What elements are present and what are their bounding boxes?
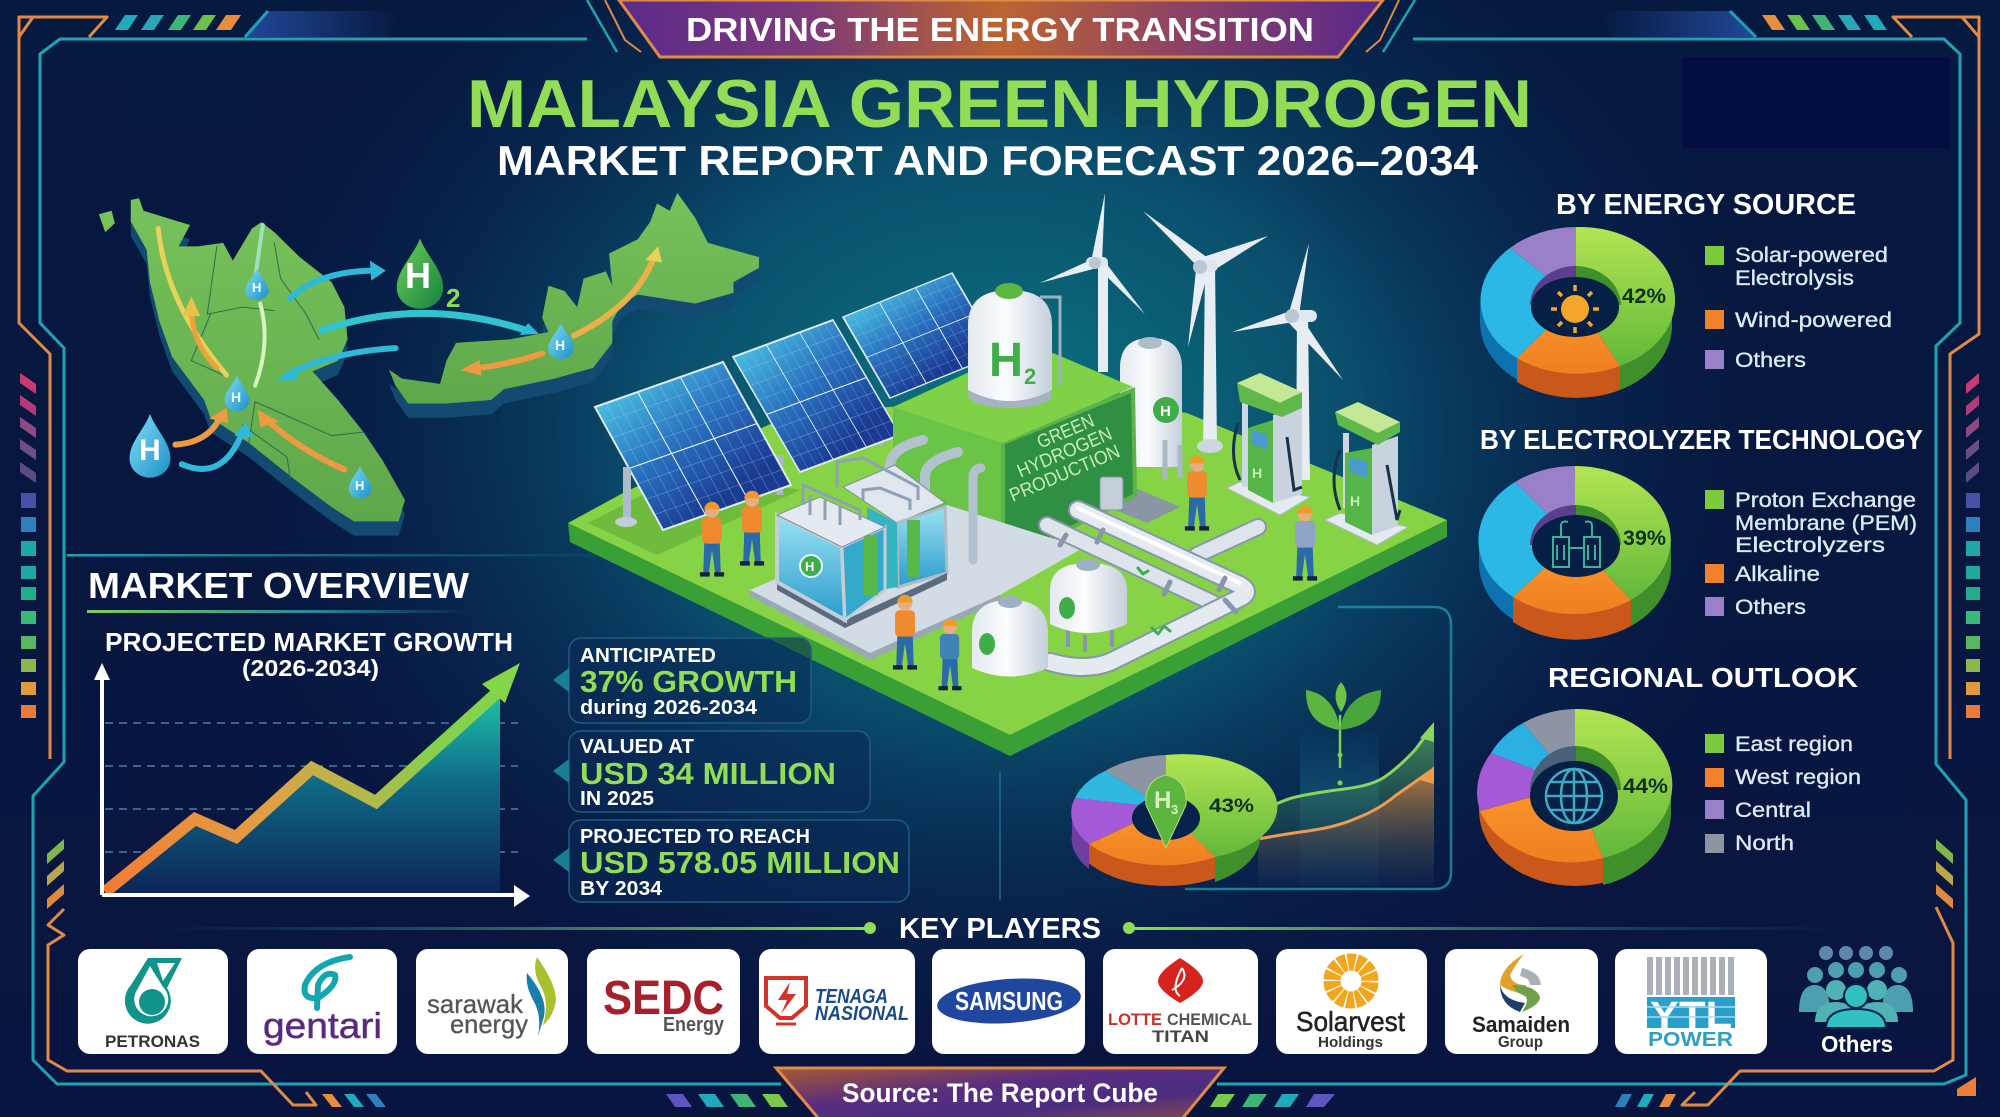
H2 storage tank: H	[989, 334, 1023, 387]
icon: H2 green drop: 2	[446, 283, 460, 313]
callout: USD 34 million	[553, 731, 870, 812]
icon: H blue drop: H	[139, 434, 161, 467]
logo card: Sarawak Energy: energy	[450, 1009, 528, 1039]
icon: small drops on map: H	[355, 478, 364, 493]
logo card: YTL Power: POWER	[1648, 1029, 1734, 1051]
callout: 37% growth	[553, 638, 811, 723]
icon: H blue drop	[130, 414, 170, 478]
logo card: Petronas: PETRONAS	[105, 1032, 200, 1051]
H2 storage tank: 2	[1024, 364, 1036, 389]
legend: regional outlook: Central	[1735, 799, 1811, 822]
map route arrows	[158, 225, 662, 470]
callout: 37% growth: 37% GROWTH	[580, 664, 797, 699]
logo card: SEDC Energy: Energy	[663, 1014, 725, 1036]
icon: H2 green drop: H	[405, 255, 431, 296]
section: by energy source	[1480, 189, 1892, 398]
donut chart: energy source: 42%	[1622, 285, 1666, 308]
fuel pumps: H	[1350, 493, 1360, 509]
label on building: HYDROGEN	[1014, 424, 1115, 482]
legend: energy source	[1705, 244, 1892, 372]
donut chart: electrolyzer technology: 39%	[1623, 527, 1666, 550]
donut chart: energy source	[1480, 227, 1675, 398]
logo card: SEDC Energy	[587, 949, 740, 1054]
illustration: green hydrogen production plant	[568, 193, 1447, 756]
fuel pumps	[1227, 373, 1408, 545]
donut chart: electrolyzer technology	[1478, 466, 1671, 640]
electrolyzer modules	[750, 440, 1083, 660]
title: MALAYSIA GREEN HYDROGEN	[467, 66, 1532, 142]
others: people group icon	[1799, 946, 1913, 1057]
legend: electrolyzer technology: Alkaline	[1735, 563, 1820, 586]
logo card: Lotte Chemical Titan: CHEMICAL	[1167, 1010, 1252, 1029]
source banner: Source: The Report Cube	[842, 1078, 1158, 1108]
logo card: Sarawak Energy	[416, 949, 568, 1054]
logo card: Solarvest: Holdings	[1318, 1034, 1383, 1051]
icon: electrolyzer	[1553, 522, 1600, 567]
legend: electrolyzer technology: Proton Exchange	[1735, 489, 1916, 512]
source banner	[776, 1068, 1224, 1117]
section: by electrolyzer technology	[1478, 424, 1923, 640]
legend: electrolyzer technology: Membrane (PEM)	[1735, 512, 1917, 535]
small donut chart: H	[1154, 787, 1171, 814]
logo card: Samaiden: Samaiden	[1472, 1012, 1570, 1037]
peninsular Malaysia	[131, 198, 405, 521]
legend: regional outlook: West region	[1735, 766, 1861, 789]
pipework	[1047, 508, 1258, 667]
banner heading: DRIVING THE ENERGY TRANSITION	[686, 11, 1314, 48]
logo card: Solarvest: Solarvest	[1296, 1006, 1405, 1037]
white silo	[1115, 337, 1182, 523]
logo card: Tenaga Nasional	[759, 949, 915, 1054]
line chart: projected market growth	[94, 627, 530, 907]
logo card: Samsung	[932, 949, 1085, 1054]
subtitle: MARKET REPORT AND FORECAST 2026–2034	[497, 137, 1479, 184]
storage tanks	[972, 559, 1127, 676]
small donut chart	[1071, 754, 1277, 886]
green production building	[893, 353, 1135, 563]
section: regional outlook	[1477, 662, 1861, 886]
callout: USD 578.05 million: USD 578.05 MILLION	[580, 845, 900, 880]
legend: electrolyzer technology: Electrolyzers	[1735, 534, 1885, 557]
line chart: projected market growth: (2026-2034)	[242, 655, 379, 681]
callout: 37% growth: ANTICIPATED	[580, 645, 716, 667]
white silo: H	[1160, 403, 1171, 420]
line chart: projected market growth: PROJECTED MARKET GROWTH	[105, 627, 513, 657]
map shadow	[131, 207, 759, 536]
chart: growth curves	[1258, 722, 1434, 886]
East Malaysia	[389, 193, 759, 404]
callout: USD 34 million: IN 2025	[580, 788, 654, 810]
label on building: PRODUCTION	[1006, 441, 1123, 507]
icon: sun	[1551, 285, 1599, 333]
logo card: YTL Power: YTL	[1650, 995, 1732, 1037]
donut chart: regional outlook: 44%	[1623, 775, 1668, 798]
section: regional outlook: REGIONAL OUTLOOK	[1548, 662, 1858, 693]
logo card: Petronas	[78, 949, 228, 1054]
legend: energy source: Wind-powered	[1735, 309, 1892, 332]
legend: regional outlook	[1705, 733, 1861, 855]
icon: small drops on map	[225, 269, 574, 499]
legend: electrolyzer technology: Others	[1735, 596, 1806, 619]
section: market overview heading: MARKET OVERVIEW	[88, 565, 469, 606]
logo card: SEDC Energy: SEDC	[603, 972, 724, 1025]
section: by energy source: BY ENERGY SOURCE	[1556, 189, 1856, 221]
map of Malaysia	[99, 193, 759, 536]
logo card: Tenaga Nasional: NASIONAL	[815, 1003, 909, 1025]
section: by electrolyzer technology: BY ELECTROLYZER TECHNOLOGY	[1480, 424, 1923, 455]
logo card: Samaiden	[1445, 949, 1598, 1054]
legend: regional outlook: North	[1735, 832, 1794, 855]
callout: USD 578.05 million: PROJECTED TO REACH	[580, 826, 810, 848]
legend: electrolyzer technology	[1705, 489, 1917, 619]
label on building: GREEN	[1034, 411, 1098, 453]
logo card: Gentari	[247, 949, 397, 1054]
legend: energy source: Solar-powered	[1735, 244, 1888, 267]
logo card: Lotte Chemical Titan	[1103, 949, 1258, 1054]
logo card: Samaiden: Group	[1498, 1034, 1543, 1051]
logo card: Solarvest	[1276, 949, 1427, 1054]
top banner	[619, 0, 1383, 57]
callout: 37% growth: during 2026-2034	[580, 697, 758, 719]
workers	[700, 456, 1317, 690]
key players heading	[150, 913, 1849, 945]
H2 storage tank	[968, 283, 1060, 408]
callout: USD 578.05 million	[553, 820, 909, 902]
icon: seedling	[1306, 682, 1381, 786]
platform	[568, 400, 1447, 756]
callout: USD 34 million: VALUED AT	[580, 736, 694, 758]
panel: center bottom pie and growth curves	[1000, 607, 1451, 900]
logo card: Lotte Chemical Titan: TITAN	[1152, 1027, 1209, 1046]
logo card: Tenaga Nasional: TENAGA	[815, 986, 888, 1008]
key players heading: KEY PLAYERS	[899, 913, 1101, 945]
logo card: Sarawak Energy: sarawak	[427, 989, 524, 1019]
small donut chart: 43%	[1209, 796, 1254, 817]
legend: energy source: Others	[1735, 349, 1806, 372]
callout: USD 578.05 million: BY 2034	[580, 878, 663, 900]
logo card: Lotte Chemical Titan: LOTTE	[1108, 1010, 1162, 1029]
icon: small drops on map: H	[252, 280, 261, 295]
legend: regional outlook: East region	[1735, 733, 1853, 756]
label on building	[1006, 411, 1123, 507]
solar panels	[595, 273, 999, 530]
donut chart: regional outlook	[1477, 709, 1672, 886]
small donut chart: 3	[1171, 802, 1178, 817]
wind turbines	[1040, 193, 1343, 480]
icon: globe	[1546, 769, 1602, 823]
icon: small drops on map: H	[555, 337, 565, 353]
logo card: YTL Power	[1615, 949, 1767, 1054]
fuel pumps: H	[1252, 465, 1262, 481]
logo card: Samsung: SAMSUNG	[955, 986, 1063, 1016]
others: people group icon: Others	[1821, 1031, 1893, 1057]
dark masked rectangle top right	[1682, 57, 1950, 148]
icon: H2 green drop	[397, 239, 460, 313]
icon: small drops on map: H	[231, 389, 241, 405]
electrolyzer modules: H	[805, 559, 814, 574]
callout: USD 34 million: USD 34 MILLION	[580, 756, 836, 791]
logo card: Gentari: gentari	[263, 1005, 382, 1046]
legend: energy source: Electrolysis	[1735, 267, 1854, 290]
